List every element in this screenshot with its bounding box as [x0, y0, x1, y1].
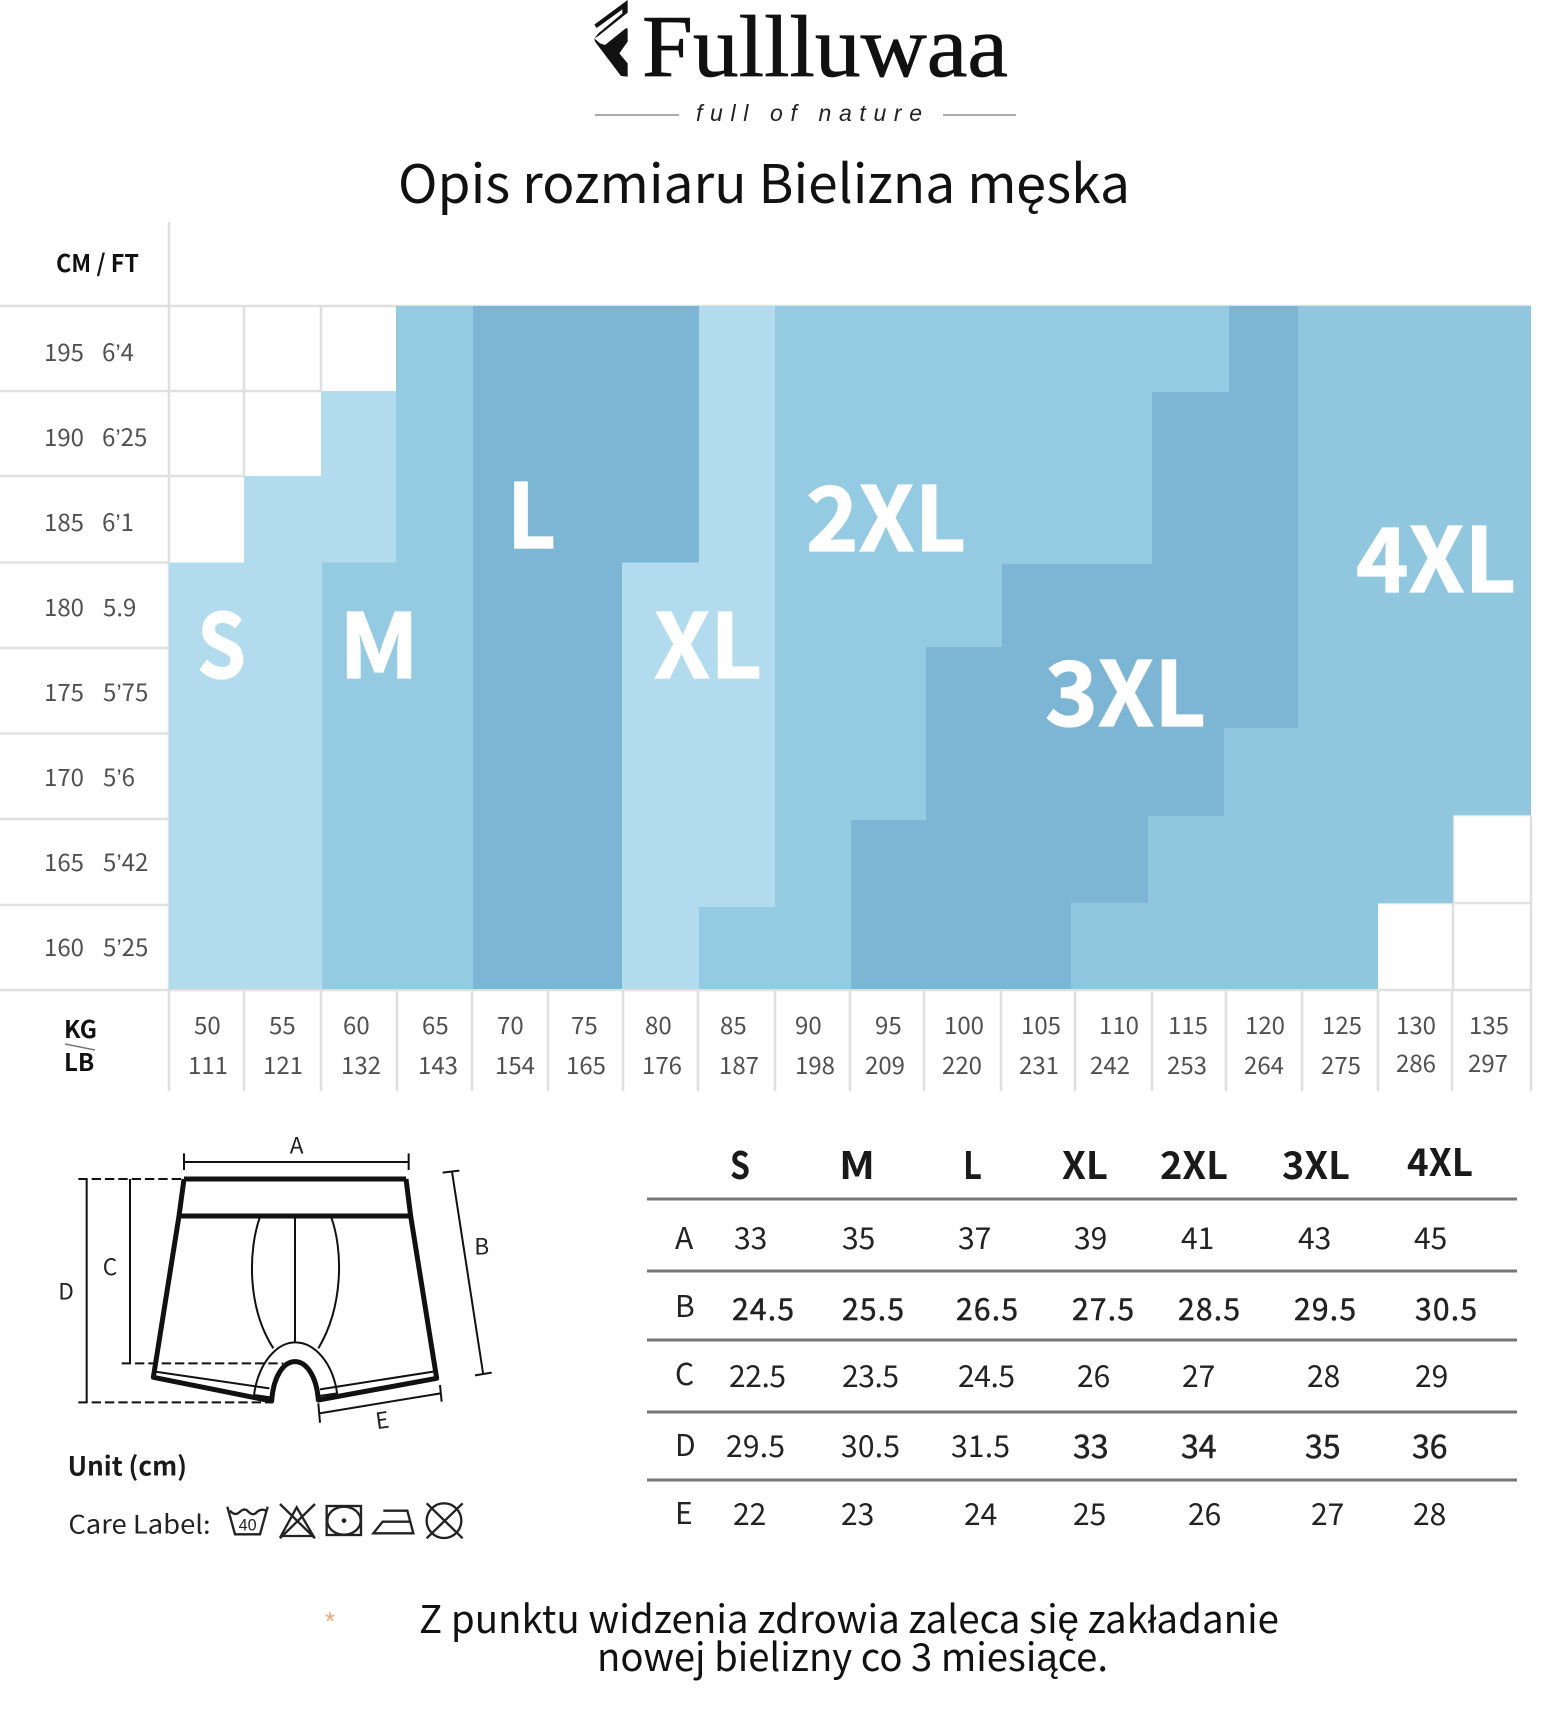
height axis labels: 180 — [44, 588, 84, 623]
measurement letters: D — [58, 1273, 74, 1306]
icon: iron — [373, 1511, 413, 1533]
size band: 4XL — [1071, 306, 1531, 989]
height axis labels: 5’6 — [103, 758, 135, 793]
height axis labels — [44, 333, 148, 963]
row B: 28.5 — [1178, 1285, 1240, 1329]
weight axis labels: 100 — [944, 1006, 984, 1041]
height axis labels: 6’1 — [102, 503, 134, 538]
height axis heading: CM / FT — [56, 244, 139, 279]
tagline: full of nature — [696, 100, 922, 126]
row A: 37 — [958, 1214, 991, 1258]
row D: 34 — [1181, 1422, 1217, 1468]
size band: XL — [622, 306, 775, 989]
brand name: Fullluwaa — [642, 0, 1008, 96]
weight axis labels: 264 — [1244, 1046, 1284, 1081]
title: Opis rozmiaru Bielizna męska — [398, 143, 1130, 219]
asterisk: * — [325, 1606, 335, 1636]
weight axis labels: 125 — [1322, 1006, 1362, 1041]
height axis labels: 195 — [44, 333, 84, 368]
row E: 24 — [964, 1490, 997, 1534]
weight axis heading: KG — [64, 1010, 97, 1045]
size band: 3XL — [851, 306, 1298, 989]
weight axis labels: 275 — [1321, 1046, 1361, 1081]
weight axis labels: 132 — [341, 1046, 381, 1081]
weight axis labels: 198 — [795, 1046, 835, 1081]
note text — [419, 1589, 1279, 1683]
weight axis labels: 209 — [865, 1046, 905, 1081]
table header — [730, 1132, 1473, 1190]
height axis labels: 190 — [44, 418, 84, 453]
row B: 25.5 — [842, 1285, 904, 1329]
icon: do not bleach — [280, 1504, 315, 1538]
row C: 28 — [1307, 1352, 1340, 1396]
icon: wash at 40 degrees — [227, 1507, 268, 1534]
row C: 24.5 — [958, 1352, 1015, 1396]
weight axis labels: 253 — [1167, 1046, 1207, 1081]
row C: 22.5 — [729, 1352, 786, 1396]
diagram: boxer briefs outline — [153, 1179, 437, 1401]
weight axis labels: 85 — [720, 1006, 747, 1041]
weight axis labels: 187 — [719, 1046, 759, 1081]
row C: C — [675, 1350, 694, 1394]
row D: 29.5 — [726, 1422, 785, 1466]
panel: underwear measurement diagram and care labels — [58, 1127, 492, 1541]
height axis labels: 5’25 — [103, 928, 148, 963]
row E: 26 — [1188, 1490, 1221, 1534]
row B: 26.5 — [956, 1285, 1018, 1329]
size band: 2XL: 2XL — [806, 448, 966, 577]
row A: 43 — [1298, 1214, 1331, 1258]
weight axis labels: 135 — [1469, 1006, 1509, 1041]
row B: 29.5 — [1294, 1285, 1356, 1329]
row B: B — [675, 1282, 695, 1326]
weight axis labels — [188, 1006, 1509, 1081]
weight axis labels: 55 — [269, 1006, 296, 1041]
height axis labels: 175 — [44, 673, 84, 708]
icon: brand mark — [594, 0, 628, 77]
row C: 29 — [1415, 1352, 1448, 1396]
icon: tumble dry — [327, 1506, 361, 1535]
weight axis heading: LB — [64, 1043, 94, 1078]
weight axis labels: 50 — [194, 1006, 221, 1041]
table header: 2XL — [1160, 1135, 1228, 1190]
weight axis labels: 65 — [422, 1006, 449, 1041]
row D: 31.5 — [951, 1422, 1010, 1466]
height axis labels: 5.9 — [103, 588, 136, 623]
weight axis labels: 165 — [566, 1046, 606, 1081]
weight axis labels: 130 — [1396, 1006, 1436, 1041]
size band: 4XL: 4XL — [1356, 489, 1516, 618]
unit note: Unit (cm) — [68, 1447, 187, 1484]
height axis labels: 170 — [44, 758, 84, 793]
row D: D — [675, 1421, 696, 1465]
weight axis labels: 105 — [1021, 1006, 1061, 1041]
size band: M — [322, 306, 473, 989]
row A: A — [675, 1214, 694, 1258]
size band: L: L — [507, 445, 556, 574]
weight axis labels: 95 — [875, 1006, 902, 1041]
care label text: Care Label: — [68, 1505, 211, 1541]
brand logo — [594, 0, 1016, 126]
row E: 28 — [1413, 1490, 1446, 1534]
height axis labels: 5’75 — [103, 673, 148, 708]
height axis labels: 165 — [44, 843, 84, 878]
weight axis labels: 231 — [1019, 1046, 1059, 1081]
weight axis labels: 110 — [1099, 1006, 1139, 1041]
size chart — [0, 222, 1531, 1091]
row D: 33 — [1073, 1422, 1109, 1468]
row E — [675, 1489, 1446, 1534]
row A: 41 — [1181, 1214, 1214, 1258]
table header: 3XL — [1282, 1135, 1350, 1190]
measurement letters: A — [290, 1127, 304, 1160]
measurement letters: B — [474, 1228, 489, 1261]
weight axis labels: 143 — [418, 1046, 458, 1081]
row A: 45 — [1414, 1214, 1447, 1258]
height axis labels: 5’42 — [103, 843, 148, 878]
size band: XL: XL — [654, 575, 762, 704]
row E: 23 — [841, 1490, 874, 1534]
row E: 27 — [1311, 1490, 1344, 1534]
size band: S: S — [197, 575, 246, 704]
measurement lines — [78, 1153, 492, 1423]
row B: 24.5 — [732, 1285, 794, 1329]
table header: S — [730, 1135, 750, 1190]
row E: 22 — [733, 1490, 766, 1534]
table header: XL — [1062, 1135, 1108, 1190]
table header: M — [839, 1135, 875, 1190]
row A: 39 — [1074, 1214, 1107, 1258]
row C: 27 — [1182, 1352, 1215, 1396]
weight axis labels: 111 — [188, 1046, 228, 1081]
note text: nowej bielizny co 3 miesiące. — [597, 1627, 1108, 1683]
icon: wash at 40 degrees: 40 — [239, 1515, 257, 1534]
size band: L — [473, 306, 699, 989]
note text: Z punktu widzenia zdrowia zaleca się zakładanie — [419, 1589, 1279, 1645]
row D: 30.5 — [841, 1422, 900, 1466]
row C: 26 — [1077, 1352, 1110, 1396]
height axis labels: 6’4 — [102, 333, 134, 368]
size band: 2XL — [699, 306, 1229, 989]
row C: 23.5 — [842, 1352, 899, 1396]
height axis labels: 185 — [44, 503, 84, 538]
weight axis labels: 120 — [1245, 1006, 1285, 1041]
weight axis labels: 115 — [1168, 1006, 1208, 1041]
row A: 33 — [734, 1214, 767, 1258]
table header: 4XL — [1407, 1132, 1473, 1187]
weight axis heading — [64, 1010, 97, 1078]
table header: L — [963, 1135, 982, 1190]
weight axis labels: 220 — [942, 1046, 982, 1081]
weight axis labels: 70 — [497, 1006, 524, 1041]
measurement letters: C — [103, 1249, 117, 1282]
weight axis labels: 60 — [343, 1006, 370, 1041]
measurement letters: E — [373, 1402, 391, 1436]
row D: 35 — [1305, 1422, 1341, 1468]
row B — [675, 1282, 1477, 1329]
icon: do not dry clean — [427, 1503, 463, 1538]
weight axis labels: 80 — [645, 1006, 672, 1041]
measurement table — [647, 1132, 1517, 1534]
weight axis labels: 297 — [1468, 1044, 1508, 1079]
weight axis labels: 121 — [263, 1046, 303, 1081]
weight axis labels: 75 — [571, 1006, 598, 1041]
weight axis labels: 154 — [495, 1046, 535, 1081]
height axis labels: 6’25 — [102, 418, 147, 453]
size band: 3XL: 3XL — [1045, 623, 1206, 752]
row E: 25 — [1073, 1490, 1106, 1534]
row A: 35 — [842, 1214, 875, 1258]
row C — [675, 1350, 1448, 1396]
row A — [675, 1214, 1447, 1258]
height axis labels: 160 — [44, 928, 84, 963]
size band: M: M — [339, 575, 419, 704]
footer note — [325, 1589, 1279, 1683]
weight axis labels: 176 — [642, 1046, 682, 1081]
measurement letters — [58, 1127, 489, 1436]
size band: S — [169, 391, 396, 989]
row D — [675, 1421, 1448, 1468]
row B: 30.5 — [1415, 1285, 1477, 1329]
row D: 36 — [1412, 1422, 1448, 1468]
row E: E — [675, 1489, 693, 1533]
weight axis labels: 90 — [795, 1006, 822, 1041]
weight axis labels: 286 — [1396, 1044, 1436, 1079]
row B: 27.5 — [1072, 1285, 1134, 1329]
weight axis labels: 242 — [1090, 1046, 1130, 1081]
